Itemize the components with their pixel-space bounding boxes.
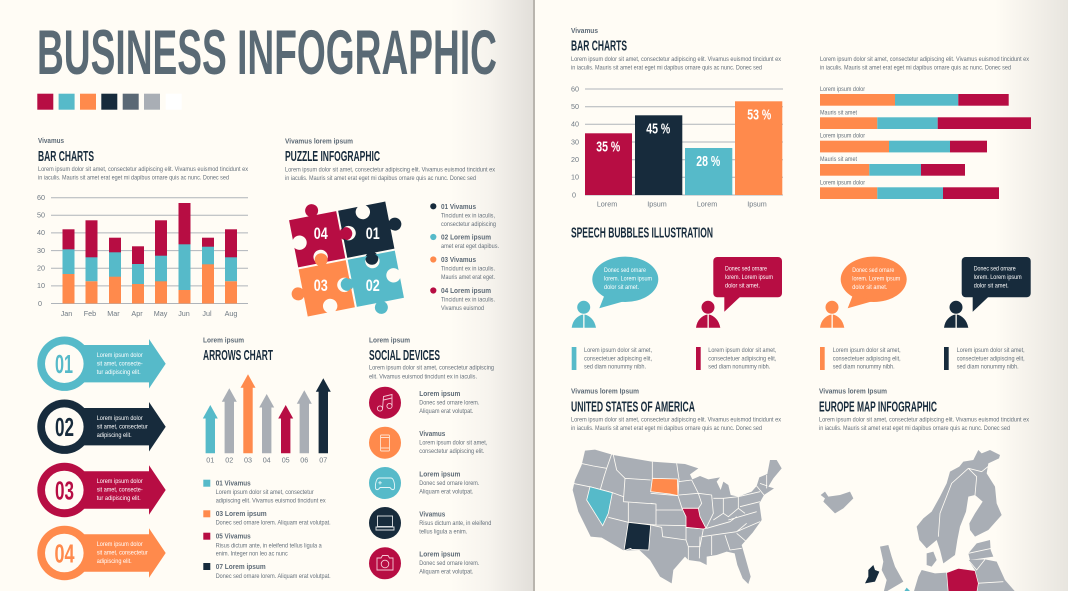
panel: speech bubbles [571, 225, 1031, 371]
arrow columns: 05 [282, 456, 290, 464]
panel: arrows chart [203, 338, 331, 580]
heading: bar charts right [571, 28, 781, 72]
caption 4: Lorem ipsum dolor sit amet, [957, 348, 1025, 354]
banner 03: 03 [55, 475, 74, 505]
heading: puzzle: Lorem ipsum dolor sit amet, consectetur adipiscing elit. Vivamus euismod tincidunt ex [285, 168, 495, 174]
icon: camera [369, 547, 401, 579]
heading: social devices: Lorem ipsum dolor sit amet, consectetur adipiscing [369, 366, 494, 372]
arrow columns: 01 [206, 456, 214, 464]
heading: bar charts [38, 138, 248, 182]
heading: bar charts: in iaculis. Mauris sit amet erat eget mi dapibus ornare quis ac nunc. Donec sed [38, 176, 229, 182]
speech bubble person 1: dolor sit amet. [604, 285, 639, 291]
heading: USA [571, 388, 781, 432]
speech bubble person 3: dolor sit amet. [852, 285, 888, 291]
puzzle legend: Tincidunt ex in iaculis, [441, 214, 495, 220]
heading: bar charts right: in iaculis. Mauris sit amet erat eget mi dapibus ornare quis ac nunc. Donec sed [571, 66, 762, 72]
social item 5: Donec sed ornare lorem. [419, 561, 480, 567]
stacked bar chart: May [154, 309, 168, 318]
arrows legend: Lorem ipsum dolor sit amet, consectetur [216, 490, 314, 496]
puzzle legend: Tincidunt ex in iaculis. [441, 266, 495, 272]
caption 1: sed diam nonummy nibh. [584, 365, 646, 371]
arrows legend: 01 Vivamus [216, 481, 251, 488]
horizontal stacked bars: Mauris sit amet [820, 157, 857, 163]
social item 4: Risus dictum ante, in eleifend [419, 521, 491, 527]
social item 4: Vivamus [419, 512, 445, 518]
arrows legend: Donec sed ornare lorem. Aliquam erat volutpat. [216, 574, 331, 580]
stacked bar chart [37, 193, 248, 318]
puzzle graphic: 01 [366, 225, 380, 243]
horizontal stacked bars [820, 57, 1031, 199]
panel: USA map [571, 388, 782, 584]
heading: USA: UNITED STATES OF AMERICA [571, 398, 695, 416]
caption 2: sed diam nonummy nibh. [708, 365, 771, 371]
horizontal stacked bars: in iaculis. Mauris sit amet erat eget mi dapibus ornare quis ac nunc. Donec sed [820, 66, 1011, 72]
arrows legend [203, 480, 331, 580]
banner 03: tur adipiscing elit. [97, 496, 141, 502]
social item 2 [419, 431, 488, 455]
column chart: Ipsum [747, 200, 767, 208]
arrows legend: enim. Integer non leo ac nunc [216, 552, 288, 558]
speech bubble person 4: lorem. Lorem ipsum [974, 275, 1022, 281]
caption 3 [820, 347, 901, 371]
banner 04: 04 [54, 538, 75, 568]
social item 3 [419, 471, 480, 495]
caption 2: consectetuer adipiscing elit, [708, 356, 777, 362]
stacked bar chart: 40 [37, 228, 45, 237]
panel: Europe map [819, 388, 1029, 591]
social item 5: Aliquam erat volutpat. [419, 570, 474, 576]
speech bubble person 1 [572, 257, 658, 328]
heading: social devices: Lorem ipsum [369, 338, 410, 344]
social item 2: consectetur adipiscing elit. [419, 449, 485, 455]
heading: social devices: SOCIAL DEVICES [369, 347, 440, 364]
horizontal stacked bars: Mauris sit amet [820, 110, 857, 116]
puzzle legend: 03 Vivamus [441, 257, 476, 264]
heading: Europe: in iaculis. Mauris sit amet erat eget mi dapibus ornare quis ac nunc. Donec sed [819, 426, 1010, 432]
column chart: 20 [571, 155, 579, 164]
Europe map [821, 450, 1017, 591]
banner 02: 02 [55, 412, 74, 442]
stacked bar chart: Jun [178, 309, 190, 318]
puzzle graphic [275, 188, 418, 330]
caption 2: Lorem ipsum dolor sit amet, [708, 348, 777, 354]
stacked bar chart: 0 [38, 299, 42, 308]
column chart: Lorem [697, 200, 717, 208]
horizontal stacked bars: Lorem ipsum dolor [820, 87, 865, 93]
heading: Europe [819, 388, 1029, 432]
arrows legend: 07 Lorem ipsum [216, 564, 266, 571]
speech bubble person 2: dolor sit amet. [725, 284, 760, 290]
speech bubble person 3: Donec sed ornare [852, 268, 895, 274]
puzzle legend: 01 Vivamus [441, 204, 476, 211]
caption 4 [944, 347, 1025, 371]
speech bubble person 4: Donec sed ornare [974, 266, 1016, 272]
speech bubble person 1: lorem. Lorem ipsum [604, 277, 652, 283]
arrow columns: 07 [319, 456, 327, 464]
speech bubble person 2 [696, 257, 782, 328]
stacked bar chart: Mar [107, 309, 120, 318]
puzzle legend: Tincidunt ex in iaculis. [441, 298, 495, 304]
heading: puzzle: Vivamus lorem ipsum [285, 138, 353, 146]
banner 02: sit amet, consectetur [97, 424, 148, 430]
arrow columns: 03 [244, 456, 252, 464]
banner 03: Lorem ipsum dolor [97, 479, 143, 485]
caption 3: Lorem ipsum dolor sit amet, [833, 348, 901, 354]
horizontal stacked bars: Lorem ipsum dolor [820, 134, 865, 140]
heading: bar charts right: BAR CHARTS [571, 38, 627, 55]
social item 2: Vivamus [419, 431, 445, 438]
puzzle graphic: 02 [366, 277, 380, 295]
title: BUSINESS INFOGRAPHIC [37, 18, 497, 88]
stacked bar chart: Jan [61, 309, 72, 318]
puzzle graphic: 03 [314, 277, 328, 295]
social item 3: Lorem ipsum [419, 471, 460, 478]
colour palette swatches [37, 94, 182, 110]
stacked bar chart: Feb [84, 309, 96, 318]
stacked bar chart: Jul [202, 309, 212, 318]
horizontal stacked bars: Lorem ipsum dolor sit amet, consectetur adipiscing elit. Vivamus euismod tincidunt ex [820, 57, 1029, 63]
caption 4: consectetuer adipiscing elit, [957, 356, 1025, 362]
banner 03 [37, 463, 166, 517]
arrows legend: Donec sed ornare lorem. Aliquam erat volutpat. [216, 521, 331, 527]
column chart [571, 84, 783, 208]
icon: gamepad [369, 467, 401, 499]
panel: numbered arrow banners [37, 336, 166, 580]
caption 3: sed diam nonummy nibh. [833, 365, 895, 371]
heading: USA: Vivamus lorem Ipsum [571, 388, 639, 396]
social item 1: Donec sed ornare lorem. [419, 400, 480, 406]
column chart: 40 [571, 120, 579, 129]
column chart: 30 [571, 137, 579, 146]
caption 4: sed diam nonummy nibh. [957, 365, 1019, 371]
column chart: 50 [571, 102, 579, 111]
heading: USA: Lorem ipsum dolor sit amet, consectetur adipiscing elit. Vivamus euismod tincidunt ex [571, 418, 781, 424]
social item 2: Lorem ipsum dolor sit amet, [419, 440, 488, 446]
stacked bar chart: Aug [225, 309, 237, 318]
heading: arrows chart: Lorem ipsum [203, 338, 244, 344]
stacked bar chart: 10 [37, 281, 45, 290]
banner 02: adipiscing elit. [97, 433, 132, 439]
column chart: 60 [571, 84, 579, 93]
social item 1: Lorem ipsum [419, 391, 460, 398]
stacked bar chart: 60 [37, 193, 45, 202]
banner 04: sit amet, consectetur [97, 550, 148, 556]
heading: social devices [369, 338, 494, 380]
banner 01: sit amet, consecte- [97, 362, 143, 368]
icon: music [369, 387, 401, 419]
social item 1: Aliquam erat volutpat. [419, 409, 474, 415]
speech bubble person 4: dolor sit amet. [974, 284, 1009, 290]
column chart: 45 % [646, 120, 670, 138]
stacked bar chart: 20 [37, 264, 45, 272]
column chart: 10 [571, 173, 579, 182]
puzzle legend [430, 203, 499, 312]
column chart: 28 % [696, 153, 720, 170]
banner 04: Lorem ipsum dolor [97, 542, 143, 548]
banner 01: tur adipiscing elit. [97, 370, 141, 376]
panel: social devices [369, 338, 494, 579]
social item 5: Lorem ipsum [419, 552, 460, 558]
puzzle legend: Vivamus euismod [441, 306, 484, 312]
USA map [573, 450, 782, 584]
banner 02: Lorem ipsum dolor [97, 416, 143, 422]
puzzle legend: consectetur adipiscing [441, 222, 496, 228]
caption 1: Lorem ipsum dolor sit amet, [584, 348, 652, 354]
arrow columns: 06 [300, 456, 308, 464]
heading: USA: in iaculis. Mauris sit amet erat eget mi dapibus ornare quis ac nunc. Donec sed [571, 426, 762, 432]
heading: bar charts right: Lorem ipsum dolor sit amet, consectetur adipiscing elit. Vivamus euismod tincidunt ex [571, 57, 781, 63]
horizontal stacked bars: Lorem ipsum dolor [820, 180, 865, 186]
caption 2 [696, 347, 777, 371]
stacked bar chart: 50 [37, 211, 45, 220]
column chart: 0 [572, 190, 576, 199]
caption 3: consectetuer adipiscing elit, [833, 356, 901, 362]
social item 4: tellus ligula a enim. [419, 530, 468, 536]
icon: phone [369, 427, 401, 459]
column chart: 35 % [596, 138, 620, 155]
column chart: Ipsum [647, 200, 667, 208]
heading: puzzle: in iaculis. Mauris sit amet erat eget mi dapibus ornare quis ac nunc. Donec sed [285, 176, 476, 182]
arrows legend: 05 Vivamus [216, 533, 251, 540]
arrows legend: adipiscing elit. Vivamus euismod tincidunt ex [216, 498, 326, 504]
banner 02 [37, 400, 166, 454]
speech bubble person 3: lorem. Lorem ipsum [852, 277, 900, 283]
banner 03: sit amet, consecte- [97, 488, 143, 494]
puzzle graphic: 04 [314, 225, 328, 243]
heading: speech bubbles: SPEECH BUBBLES ILLUSTRATION [571, 225, 713, 242]
speech bubble person 2: lorem. Lorem ipsum [725, 275, 773, 281]
heading: bar charts: Lorem ipsum dolor sit amet, consectetur adipiscing elit. Vivamus euismod tincidunt ex [38, 167, 248, 173]
heading: puzzle: PUZZLE INFOGRAPHIC [285, 148, 380, 165]
banner 01: Lorem ipsum dolor [97, 353, 143, 359]
speech bubble person 3 [820, 257, 907, 328]
heading: bar charts right: Vivamus [571, 28, 598, 35]
heading: arrows chart [203, 338, 273, 364]
arrows legend: 03 Lorem ipsum [216, 511, 267, 518]
panel: stacked bar charts [37, 138, 248, 318]
caption 1: consectetuer adipiscing elit, [584, 356, 652, 362]
puzzle legend: amet erat eget dapibus. [441, 244, 499, 250]
heading: bar charts: BAR CHARTS [38, 148, 94, 165]
speech bubble person 2: Donec sed ornare [725, 266, 768, 272]
icon: laptop [369, 507, 401, 539]
speech bubble person 4 [944, 257, 1031, 328]
column chart: Lorem [597, 200, 617, 208]
heading: Europe: Vivamus lorem Ipsum [819, 388, 887, 396]
panel: percentage bar charts [571, 28, 1031, 208]
social item 3: Aliquam erat volutpat. [419, 489, 474, 495]
banner 04 [37, 526, 166, 580]
speech bubble person 1: Donec sed ornare [604, 268, 647, 274]
puzzle legend: 04 Lorem ipsum [441, 288, 491, 295]
stacked bar chart: Apr [131, 309, 143, 318]
social item 3: Donec sed ornare lorem. [419, 481, 480, 487]
arrow columns: 04 [263, 456, 271, 464]
stacked bar chart: 30 [37, 246, 45, 255]
heading: arrows chart: ARROWS CHART [203, 347, 273, 364]
banner 04: adipiscing elit. [97, 559, 132, 565]
panel: puzzle infographic [275, 138, 499, 330]
arrow columns: 02 [225, 456, 233, 464]
heading: social devices: elit. Vivamus euismod tincidunt ex in iaculis. [369, 374, 477, 380]
banner 01: 01 [55, 349, 73, 379]
puzzle legend: 02 Lorem ipsum [441, 234, 491, 242]
social item 4 [419, 512, 491, 536]
heading: puzzle [285, 138, 495, 182]
heading: bar charts: Vivamus [38, 138, 64, 145]
banner 01 [37, 336, 166, 391]
heading: Europe: Lorem ipsum dolor sit amet, consectetur adipiscing elit. Vivamus euismod tincidunt ex [819, 418, 1029, 424]
column chart: 53 % [747, 106, 771, 124]
heading: Europe: EUROPE MAP INFOGRAPHIC [819, 398, 937, 416]
puzzle legend: Mauris amet erat eget. [441, 275, 495, 281]
caption 1 [572, 347, 652, 371]
social item 5 [419, 552, 480, 576]
arrows legend: Risus dictum ante, in eleifend tellus ligula a [216, 543, 322, 549]
social item 1 [419, 391, 480, 415]
arrow columns [203, 374, 331, 464]
